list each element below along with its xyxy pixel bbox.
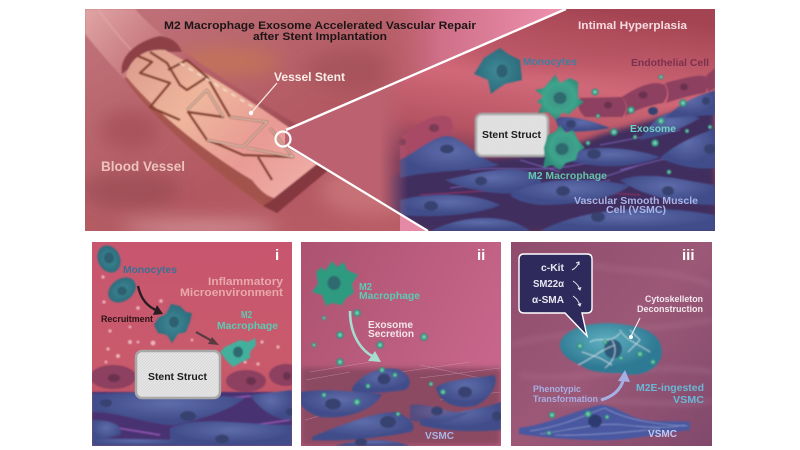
monocyte body — [474, 48, 522, 94]
label phenotypic transformation — [533, 384, 598, 404]
label stent struct i: Stent Struct — [148, 372, 208, 383]
title: M2 Macrophage Exosome Accelerated Vascular Repair — [164, 20, 477, 32]
pink corner below zoom line — [400, 216, 426, 231]
marker labels — [532, 263, 565, 306]
body — [220, 338, 256, 367]
label phenotypic transformation: Transformation — [533, 394, 598, 404]
macrophage body — [543, 125, 585, 170]
label blood vessel: Blood Vessel — [101, 159, 185, 174]
label m2 macrophage ii — [359, 281, 420, 302]
macrophage body — [535, 75, 584, 120]
exosomes — [586, 75, 712, 174]
nucleus — [104, 252, 114, 264]
smooth muscle layer base — [390, 95, 715, 231]
label m2 macrophage ii: M2 — [359, 281, 372, 293]
stent mesh — [138, 52, 293, 180]
M2 macrophage i — [220, 338, 256, 367]
cell 2 — [301, 390, 382, 418]
label m2 macrophage ii: Macrophage — [359, 290, 420, 302]
label vessel stent: Vessel Stent — [274, 72, 345, 84]
activated monocyte — [154, 304, 192, 343]
M2 macrophage upper — [535, 75, 584, 120]
title — [164, 20, 477, 43]
label cytoskeleton: Cytoskelleton — [645, 294, 703, 304]
marker labels: c-Kit — [541, 263, 565, 274]
nucleus — [588, 414, 602, 428]
panel: main vessel overview — [80, 9, 720, 235]
label inflammatory microenvironment: Microenvironment — [180, 287, 283, 299]
cell 5 — [420, 402, 501, 431]
stent mesh highlight — [180, 63, 293, 157]
label vsmc iii: VSMC — [648, 429, 677, 440]
contractile vsmc — [519, 405, 690, 440]
label exosome secretion: Secretion — [368, 329, 414, 340]
fibrous tissue band — [301, 368, 501, 446]
sparkles i — [101, 275, 280, 366]
label m2 macrophage i — [217, 309, 278, 332]
nucleus — [169, 316, 179, 328]
monocyte round lower — [103, 272, 141, 308]
marker labels: α-SMA — [532, 295, 564, 306]
panel iii background — [511, 242, 712, 446]
endothelial row — [90, 365, 136, 389]
label exosome secretion: Exosome — [368, 320, 413, 331]
panel iii tissue streaks — [511, 262, 712, 405]
marker labels: SM22α — [533, 279, 565, 290]
background tissue shading — [80, 48, 420, 235]
nucleus — [233, 346, 243, 358]
recruitment arrow — [138, 286, 163, 315]
exosomes iii — [547, 410, 609, 435]
label vsmc ii: VSMC — [425, 431, 454, 442]
nucleus — [604, 340, 622, 358]
stent strut rectangle — [476, 114, 548, 156]
body — [312, 261, 358, 306]
label stent struct: Stent Struct — [482, 130, 542, 141]
secretion arrow — [350, 311, 381, 362]
label i: i — [275, 247, 279, 264]
label m2 macrophage: M2 Macrophage — [528, 170, 607, 182]
vessel wall highlight — [102, 15, 132, 50]
panel ii background — [301, 242, 501, 446]
trend arrows — [572, 262, 581, 306]
zoom lens panel — [280, 9, 720, 231]
body — [154, 304, 192, 343]
label m2e-ingested vsmc: VSMC — [673, 395, 704, 406]
exosomes — [577, 340, 656, 365]
label cytoskeleton — [637, 294, 703, 314]
label m2e-ingested vsmc: M2E-ingested — [636, 383, 704, 394]
label iii: iii — [682, 247, 695, 264]
vsmc cells ii — [301, 368, 502, 446]
label m2 macrophage i: Macrophage — [217, 320, 278, 332]
vascular smooth muscle cells — [400, 90, 716, 231]
label monocytes: Monocytes — [523, 57, 577, 68]
panel i — [90, 242, 303, 446]
label phenotypic transformation: Phenotypic — [533, 384, 581, 394]
monocyte body — [93, 242, 125, 276]
label intimal hyperplasia: Intimal Hyperplasia — [578, 20, 688, 32]
bubble shape — [519, 254, 592, 336]
lens background — [280, 9, 720, 231]
endothelial cell row — [578, 97, 626, 117]
monocyte body — [103, 272, 141, 308]
cell 6 — [410, 405, 470, 423]
label monocytes i: Monocytes — [123, 265, 177, 276]
panel iii — [511, 242, 712, 446]
zoom circle — [276, 132, 290, 146]
purple fibres — [420, 130, 700, 195]
cell body — [560, 323, 662, 375]
vascular smooth muscle layer i — [92, 390, 294, 446]
endothelial cells i — [90, 364, 303, 392]
lens left fade — [285, 99, 406, 216]
label cytoskeleton: Deconstruction — [637, 304, 703, 314]
title: after Stent Implantation — [253, 31, 387, 43]
cell 4 — [312, 412, 414, 441]
label recruitment: Recruitment — [101, 314, 153, 324]
vessel lumen — [126, 50, 322, 198]
label exosome: Exosome — [630, 124, 676, 135]
labels: overview — [101, 20, 709, 216]
vessel tube — [85, 9, 340, 213]
ingested vsmc — [560, 323, 662, 375]
label inflammatory microenvironment: Inflammatory — [208, 276, 284, 288]
monocyte nucleus — [496, 64, 508, 78]
speech bubble — [519, 254, 592, 336]
m2 macrophage ii — [312, 261, 358, 306]
label vsmc: Cell (VSMC) — [606, 204, 666, 216]
panel ii — [301, 242, 502, 446]
monocyte round upper — [93, 242, 125, 276]
cytoskeleton fibres — [578, 330, 650, 368]
vessel outer wall — [85, 9, 296, 200]
fibres ii — [305, 362, 500, 420]
label inflammatory microenvironment — [180, 276, 284, 299]
fibre base — [92, 392, 292, 446]
cell 7 — [335, 440, 410, 446]
pink highlight above zoom line — [394, 9, 563, 81]
vessel stent pointer — [249, 83, 277, 115]
M2 macrophage lower — [543, 125, 585, 170]
vsmc shapes — [92, 390, 292, 446]
label ii: ii — [477, 247, 485, 264]
arrow to macrophage — [196, 332, 219, 345]
vessel cut end rim — [263, 165, 326, 213]
stent strut box — [476, 114, 548, 156]
label endothelial cell: Endothelial Cell — [631, 58, 709, 69]
zoom line upper — [286, 9, 566, 130]
lens shading — [470, 36, 650, 64]
cell 1 — [352, 368, 410, 393]
macrophage nucleus — [556, 143, 568, 155]
cell 3 — [436, 375, 496, 407]
endothelial cells — [398, 68, 715, 160]
label vsmc — [574, 195, 698, 216]
vessel lower wall shade — [124, 77, 272, 206]
panel background — [85, 9, 435, 231]
stent strut box i — [136, 351, 220, 398]
cytoskeleton pointer — [629, 318, 640, 339]
label vsmc: Vascular Smooth Muscle — [574, 195, 698, 207]
zoom line lower — [288, 146, 428, 231]
actin fibres — [530, 408, 688, 435]
nucleus — [328, 276, 340, 290]
panel i background — [92, 242, 292, 446]
exosomes ii — [312, 309, 446, 416]
cell body — [519, 405, 690, 440]
label m2e-ingested vsmc — [636, 383, 704, 406]
label exosome secretion — [368, 320, 414, 340]
macrophage nucleus — [554, 92, 566, 104]
monocyte cell — [474, 48, 522, 94]
nucleus — [117, 286, 127, 296]
vessel open end top — [122, 36, 182, 74]
label m2 macrophage i: M2 — [241, 309, 252, 321]
phenotypic arrow — [601, 370, 630, 400]
